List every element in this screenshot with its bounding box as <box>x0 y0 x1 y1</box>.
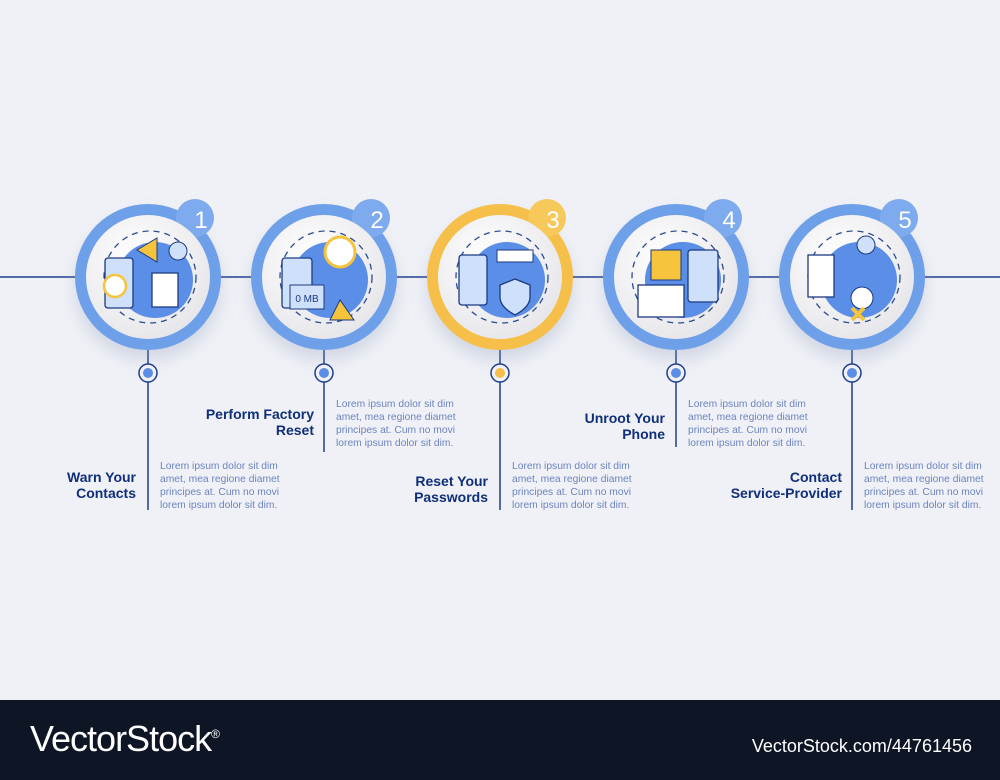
step 3 circle <box>427 199 573 350</box>
title 2: Reset <box>276 422 314 438</box>
body 2: Lorem ipsum dolor sit dim amet, mea regione diamet principes at. Cum no movi lorem ipsum dolor sit dim. <box>336 399 456 449</box>
title 4: Unroot Your <box>585 410 665 426</box>
step 5 circle: 5 <box>898 207 912 234</box>
title 5: Service-Provider <box>731 485 842 501</box>
step 1 circle <box>75 199 221 350</box>
title 3: Passwords <box>414 489 488 505</box>
step 2 circle <box>251 199 397 350</box>
title 5 <box>731 469 842 501</box>
title 3 <box>414 473 488 505</box>
footer logo: VectorStock® <box>30 718 219 759</box>
title 1 <box>67 469 136 501</box>
title 1: Contacts <box>76 485 136 501</box>
body 1: Lorem ipsum dolor sit dim amet, mea regione diamet principes at. Cum no movi lorem ipsum dolor sit dim. <box>160 461 280 511</box>
footer <box>0 700 1000 780</box>
body 4: Lorem ipsum dolor sit dim amet, mea regione diamet principes at. Cum no movi lorem ipsum dolor sit dim. <box>688 399 808 449</box>
footer url: VectorStock.com/44761456 <box>752 736 972 756</box>
step 4 circle: 4 <box>722 207 736 234</box>
title 1: Warn Your <box>67 469 136 485</box>
step 2 circle: 0 MB <box>295 294 319 305</box>
title 2: Perform Factory <box>206 406 314 422</box>
title 5: Contact <box>790 469 842 485</box>
title 4 <box>585 410 665 442</box>
connector dots <box>139 364 861 382</box>
step 4 circle <box>603 199 749 350</box>
title 2 <box>206 406 314 438</box>
step 1 circle: 1 <box>194 207 208 234</box>
body 3: Lorem ipsum dolor sit dim amet, mea regione diamet principes at. Cum no movi lorem ipsum dolor sit dim. <box>512 461 632 511</box>
title 4: Phone <box>622 426 665 442</box>
step 5 circle <box>779 199 925 350</box>
step 3 circle: 3 <box>546 207 560 234</box>
title 3: Reset Your <box>415 473 488 489</box>
step 2 circle: 2 <box>370 207 384 234</box>
body 5: Lorem ipsum dolor sit dim amet, mea regione diamet principes at. Cum no movi lorem ipsum dolor sit dim. <box>864 461 984 511</box>
